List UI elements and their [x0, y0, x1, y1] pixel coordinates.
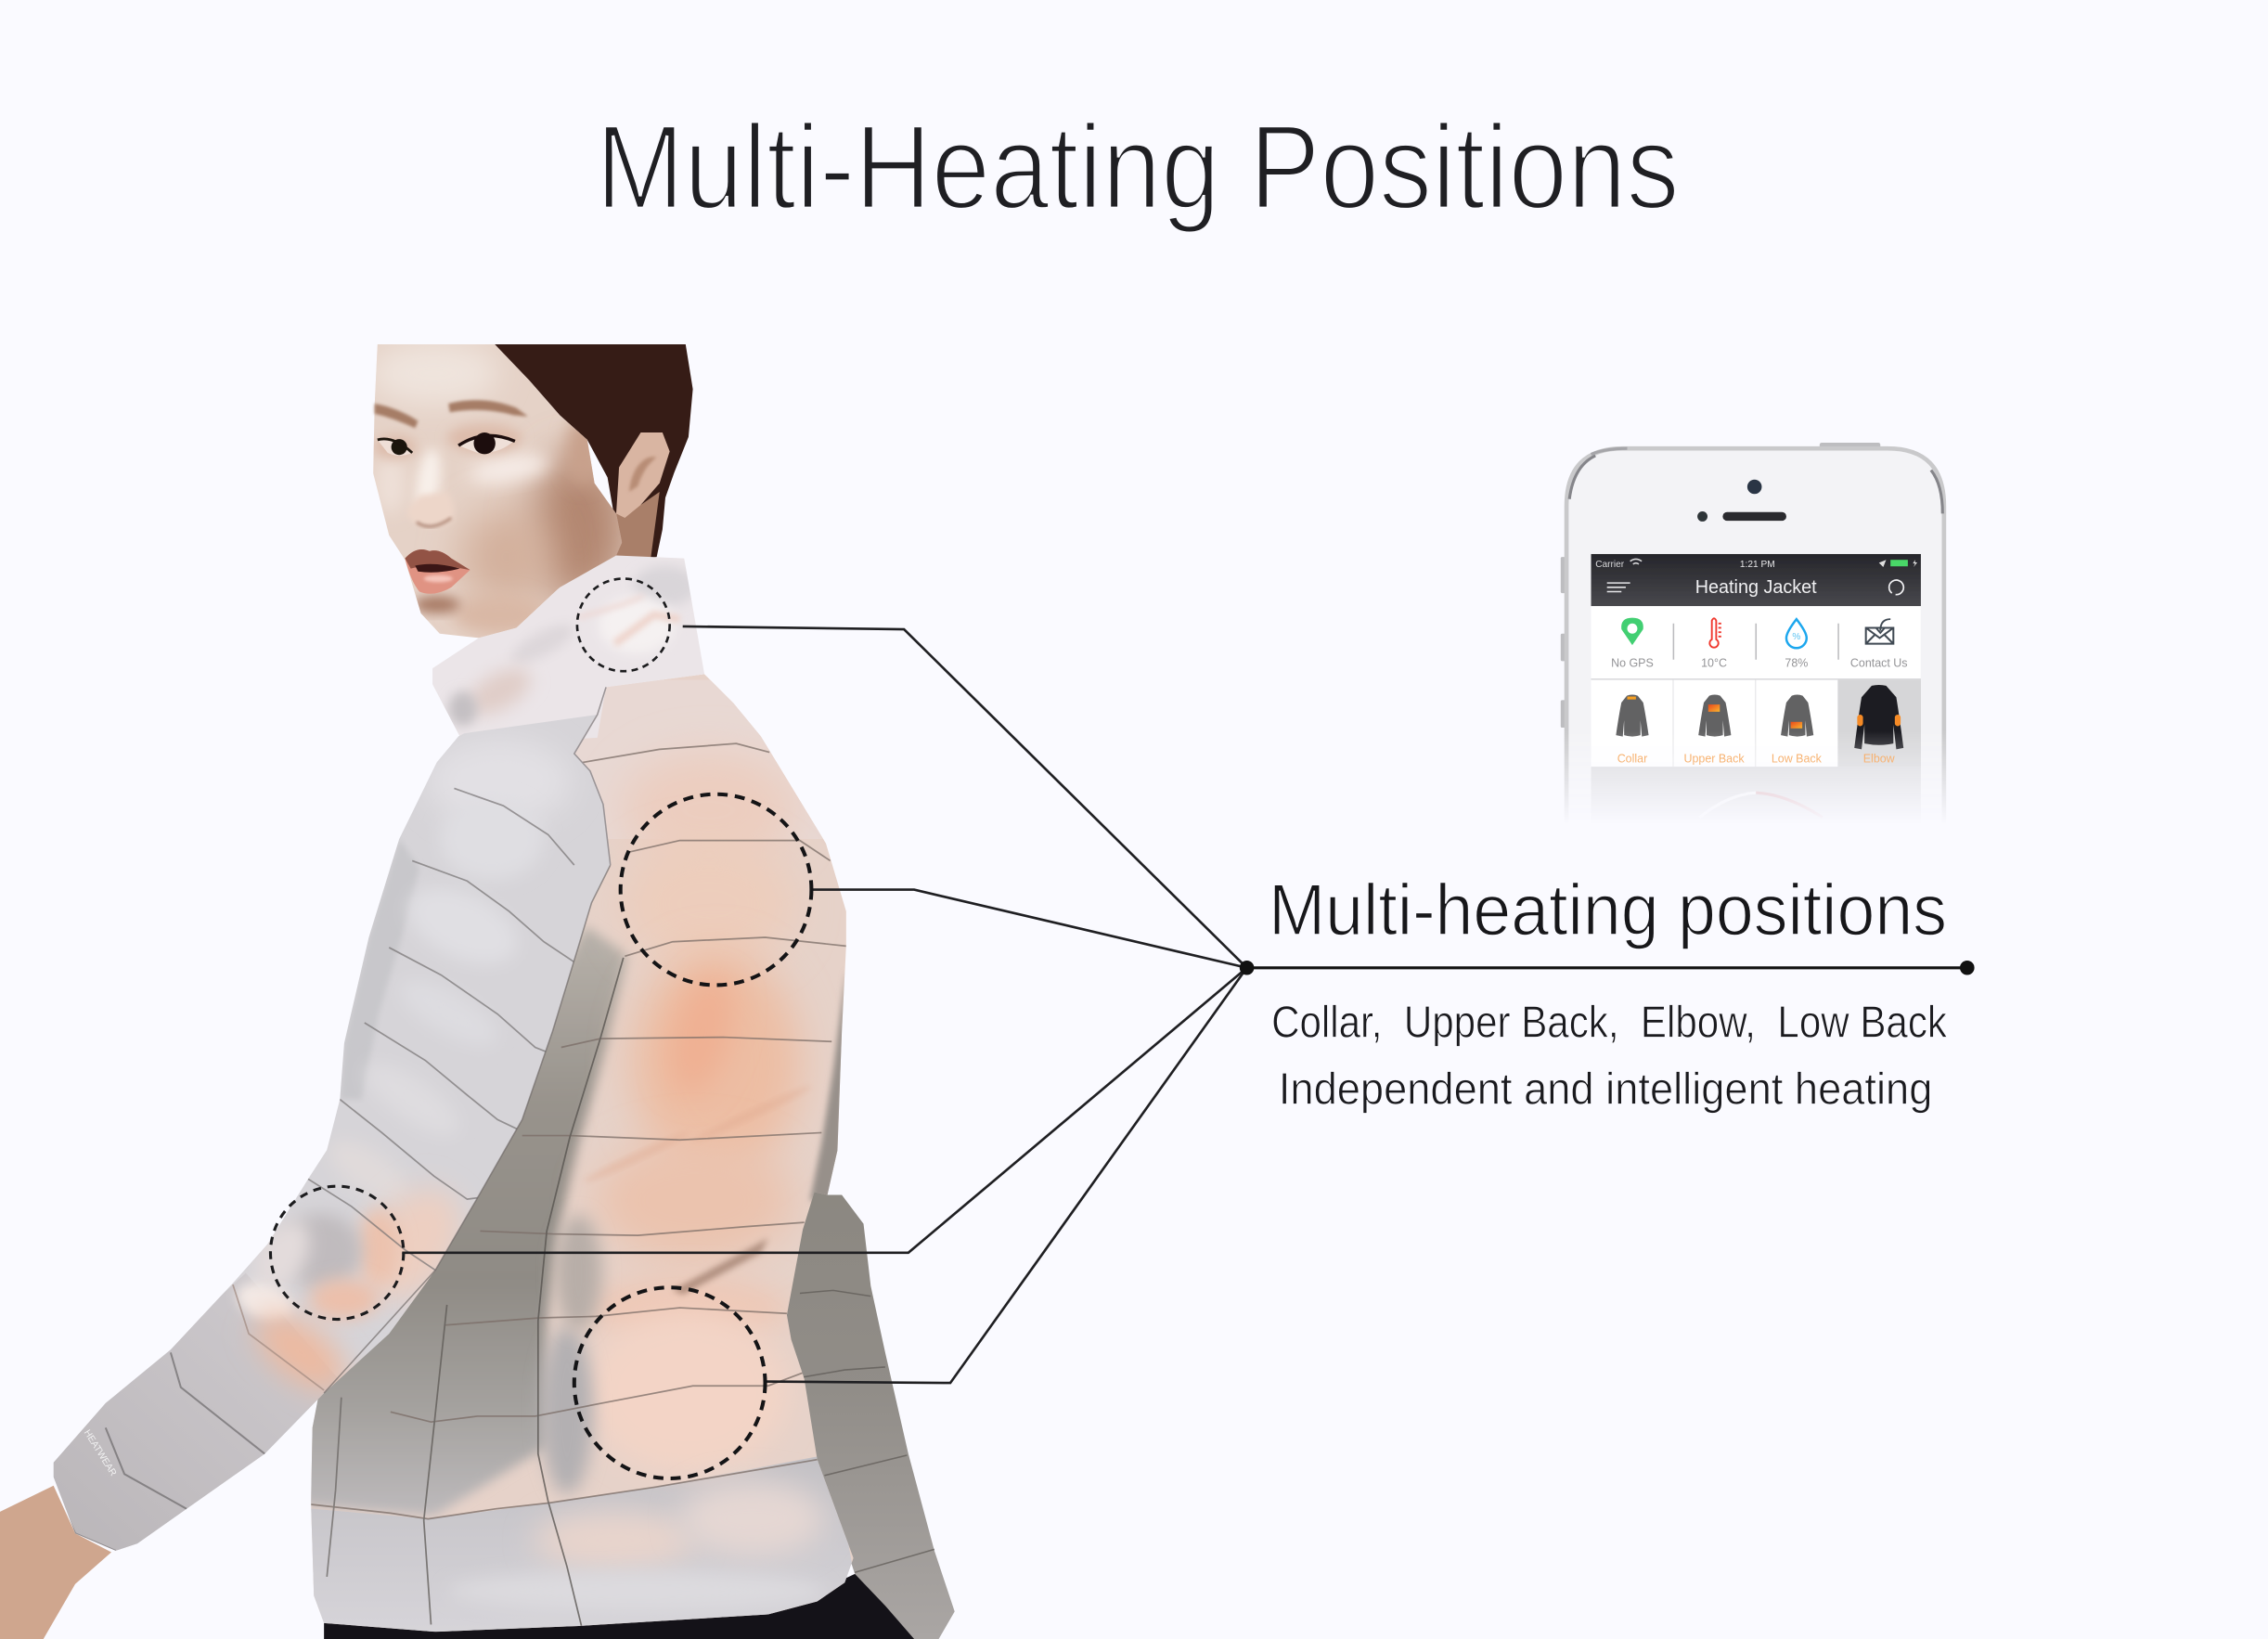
- dashed circle: low back: [574, 1287, 766, 1478]
- line end dot: [1960, 961, 1975, 975]
- model wearing heated jacket: [0, 342, 955, 1639]
- tile: upper back: Upper Back: [1683, 752, 1745, 765]
- shoulder seam: [574, 687, 611, 865]
- status row: Contact Us: [1850, 657, 1908, 670]
- status row: 78%: [1785, 657, 1808, 670]
- quilting seams on back: [311, 743, 846, 1626]
- icon: thermometer: [1709, 618, 1721, 648]
- tile: upper back: [1683, 695, 1745, 765]
- app header: 1:21 PM: [1740, 560, 1775, 570]
- phone metal corners: [1569, 448, 1942, 513]
- dashed circle: elbow: [270, 1186, 404, 1320]
- positions text: Collar, Upper Back, Elbow, Low Back: [1271, 998, 1948, 1048]
- heat glow: [622, 748, 796, 839]
- ear: [616, 432, 670, 518]
- collar: [432, 555, 704, 739]
- phone side buttons: [1561, 443, 1880, 728]
- phone body: [1566, 448, 1944, 839]
- elbow heat: [379, 1186, 463, 1301]
- rear sleeve seams: [800, 1290, 934, 1572]
- status row: 10°C: [1701, 657, 1727, 670]
- icon: envelope: [1866, 619, 1893, 644]
- connector hub dot: [1240, 961, 1254, 975]
- title: Multi-Heating Positions: [596, 100, 1680, 234]
- grey strip under sleeve: [340, 839, 419, 1100]
- position tiles: [1591, 680, 1921, 767]
- face: [373, 344, 622, 639]
- jacket body: [290, 665, 868, 1639]
- icon: GPS pin: [1621, 618, 1643, 645]
- dashed circle: collar: [577, 578, 670, 671]
- nose: [414, 492, 453, 529]
- tile: collar: [1616, 695, 1649, 765]
- diagonal fold shadow: [673, 1238, 768, 1295]
- app header: [1591, 554, 1921, 606]
- rear sleeve: [774, 1142, 955, 1639]
- sensor: [1697, 511, 1707, 522]
- app header: Carrier: [1595, 560, 1625, 570]
- subheading: Multi-heating positions: [1269, 869, 1947, 950]
- sleeve outline seam: [324, 865, 611, 1393]
- status row: [1591, 606, 1921, 678]
- eyes: [378, 432, 515, 456]
- lips: [405, 549, 470, 594]
- status row: %: [1792, 632, 1800, 642]
- app header: Heating Jacket: [1695, 577, 1817, 598]
- grey to peach transition: [541, 1326, 593, 1494]
- tile: elbow selected: [1854, 685, 1903, 765]
- hem band: [311, 1457, 852, 1632]
- sleeve seams: [62, 788, 574, 1551]
- grey left flank: [290, 926, 627, 1516]
- tile: low back: Low Back: [1772, 752, 1823, 765]
- connector lines: [402, 626, 1967, 1383]
- hand: [0, 1486, 111, 1639]
- phone app mockup: [1561, 443, 1944, 839]
- tile: low back: [1772, 695, 1823, 765]
- icon: humidity drop: [1786, 619, 1807, 648]
- description text: Independent and intelligent heating: [1279, 1064, 1932, 1114]
- grey strip at back edge: [810, 969, 846, 1201]
- tile: elbow selected: Elbow: [1863, 752, 1896, 765]
- brows: [375, 400, 528, 428]
- tile: collar: Collar: [1617, 752, 1647, 765]
- hair: [495, 344, 693, 557]
- heating dial arc: [1699, 793, 1756, 818]
- neck: [559, 492, 660, 588]
- camera: [1747, 480, 1761, 494]
- cuff logo: HEATWEAR: [82, 1428, 118, 1478]
- jacket sleeve: [44, 709, 622, 1562]
- black trousers: [324, 1574, 914, 1639]
- dashed circle: upper back: [621, 794, 811, 985]
- status row: No GPS: [1611, 657, 1654, 670]
- screen background: [1591, 554, 1921, 839]
- speaker: [1722, 512, 1786, 521]
